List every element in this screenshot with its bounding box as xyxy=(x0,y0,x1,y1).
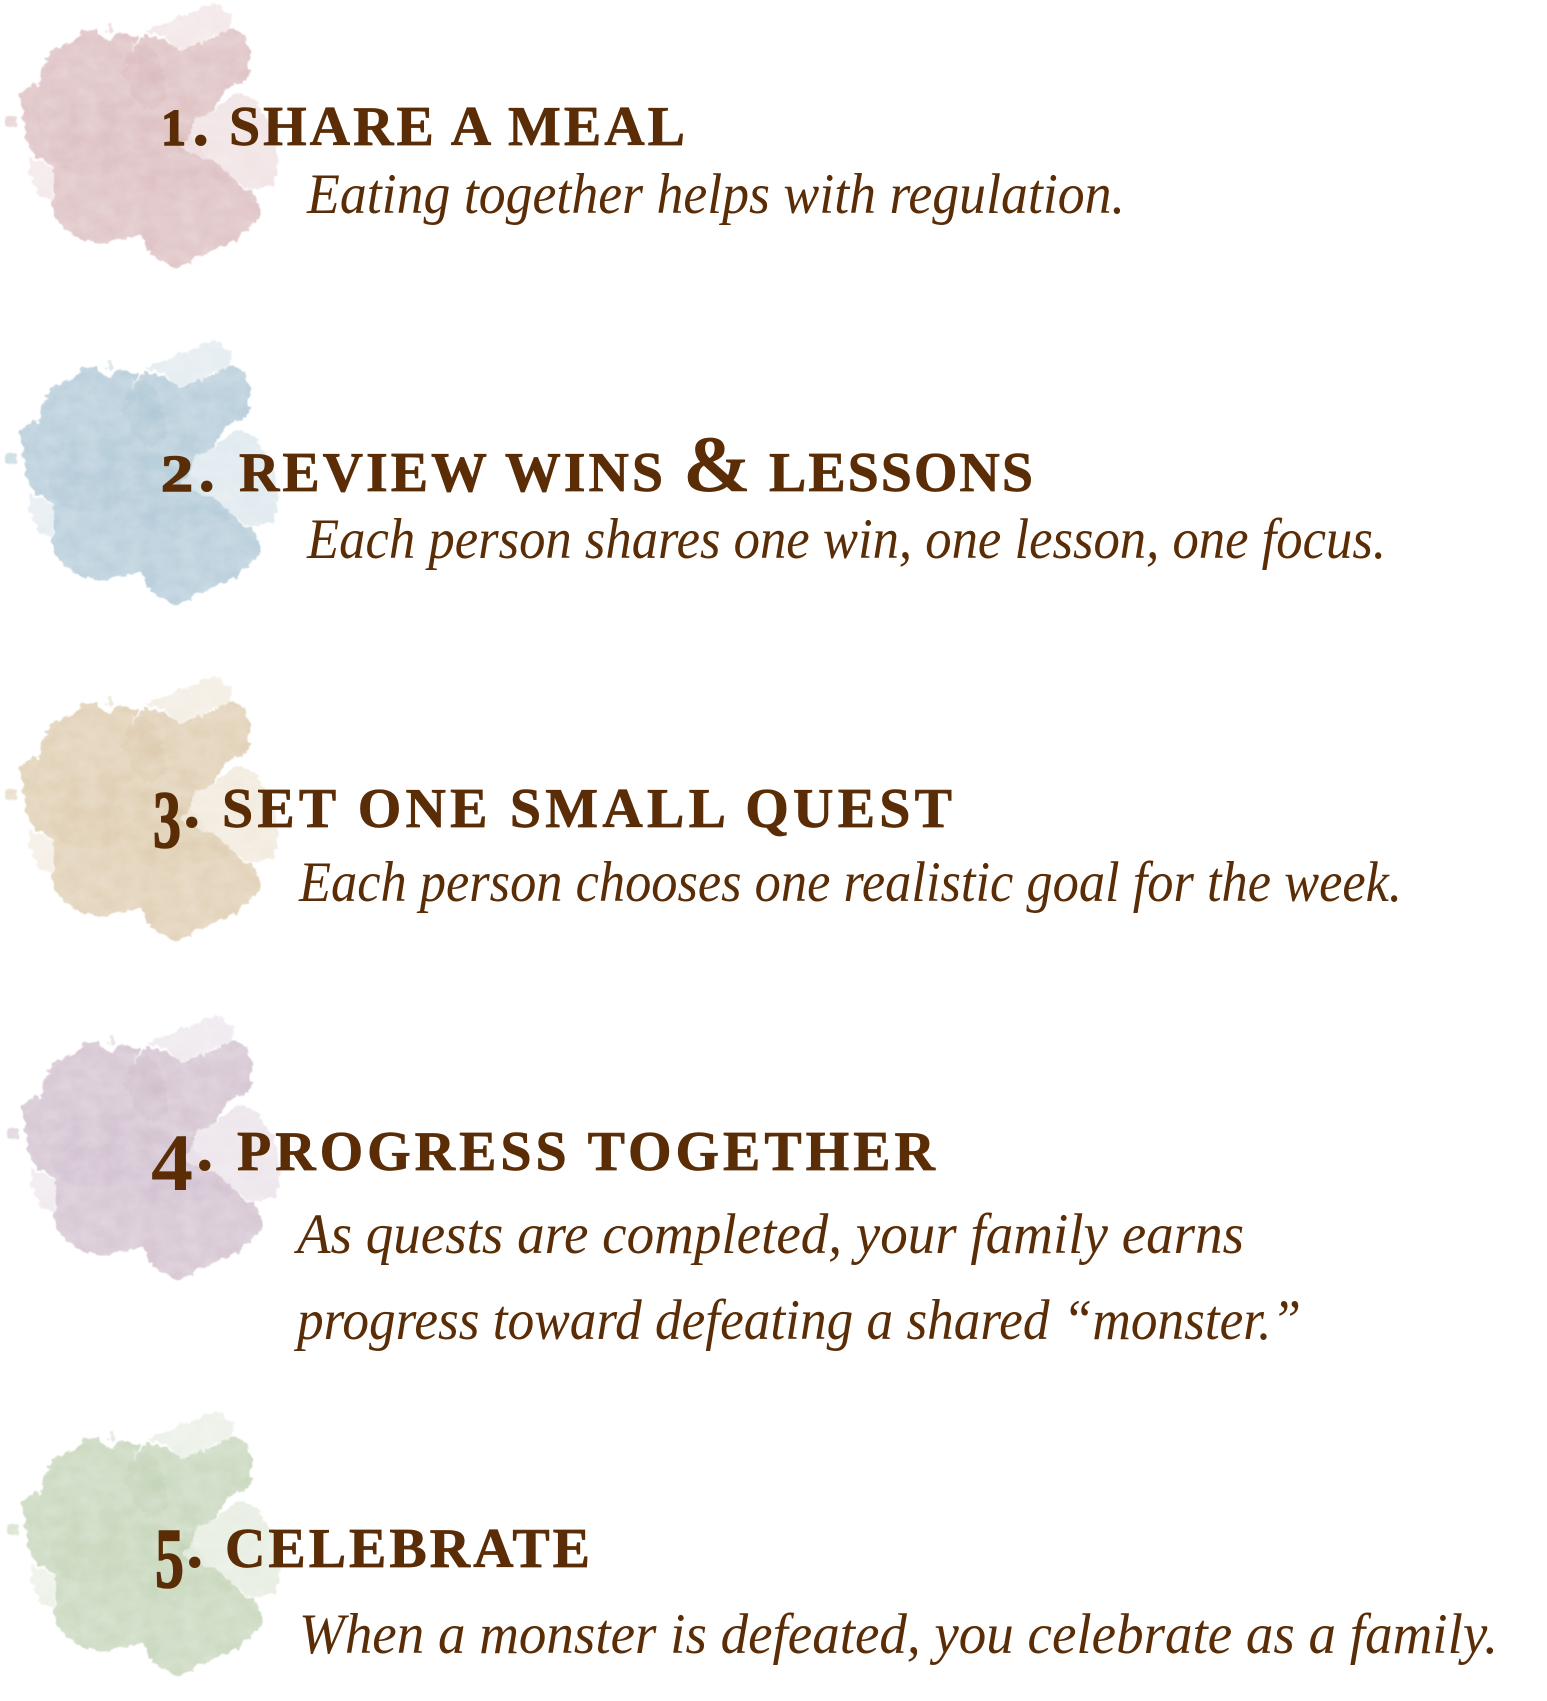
heading: step 4: PROGRESS TOGETHER xyxy=(237,1121,936,1183)
heading: step 5 xyxy=(155,1506,590,1606)
description: step 4 xyxy=(293,1203,1301,1352)
watercolor blob: green xyxy=(6,1411,280,1676)
heading: step 2 xyxy=(161,421,1033,509)
description: step 2: Each person shares one win, one lesson, one focus. xyxy=(306,508,1386,571)
description: step 4: As quests are completed, your family earns xyxy=(293,1203,1244,1266)
heading: step 5: 5 xyxy=(155,1510,184,1606)
heading: step 5: CELEBRATE xyxy=(225,1518,590,1580)
watercolor blob: pink xyxy=(4,3,278,268)
heading: step 2: REVIEW WINS xyxy=(239,442,663,504)
heading: step 1: 1 xyxy=(161,100,186,157)
heading: step 4 xyxy=(151,1109,936,1208)
step 5: celebrate xyxy=(6,1411,1498,1676)
heading: step 5: . xyxy=(186,1506,204,1583)
step 1: share a meal xyxy=(4,3,1125,268)
heading: step 2: . xyxy=(198,430,216,507)
heading: step 2: & xyxy=(683,421,751,509)
step 3: set one small quest xyxy=(4,676,1402,941)
watercolor blob: tan xyxy=(4,676,278,941)
heading: step 1: SHARE A MEAL xyxy=(229,96,685,158)
heading: step 3: . xyxy=(183,766,200,843)
heading: step 3: SET ONE SMALL QUEST xyxy=(222,778,952,840)
heading: step 2: 2 xyxy=(161,446,193,503)
heading: step 3: 3 xyxy=(153,774,181,865)
step 2: review wins and lessons xyxy=(4,340,1386,605)
watercolor blob: blue xyxy=(4,340,278,605)
heading: step 2: LESSONS xyxy=(769,442,1033,504)
heading: step 4: . xyxy=(196,1109,214,1186)
description: step 3: Each person chooses one realistic goal for the week. xyxy=(298,851,1402,914)
description: step 4: progress toward defeating a shared “monster.” xyxy=(293,1289,1301,1352)
step 4: progress together xyxy=(6,1015,1301,1352)
heading: step 1: . xyxy=(192,84,210,161)
description: step 5: When a monster is defeated, you celebrate as a family. xyxy=(299,1603,1498,1666)
heading: step 3 xyxy=(153,766,952,865)
description: step 1: Eating together helps with regulation. xyxy=(306,163,1125,226)
watercolor blob: purple xyxy=(6,1015,280,1280)
heading: step 4: 4 xyxy=(151,1117,193,1208)
